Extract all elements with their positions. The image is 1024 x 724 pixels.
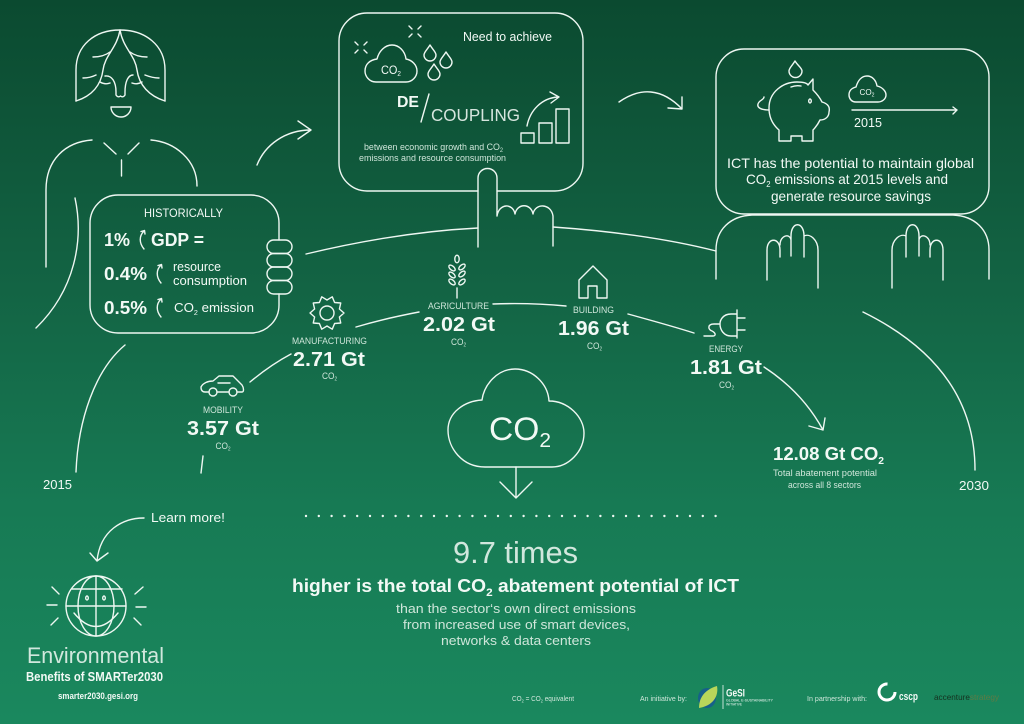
resource row xyxy=(104,259,247,288)
total abatement potential: Total abatement potential xyxy=(773,468,877,479)
total abatement potential: 2 xyxy=(878,456,884,467)
icon: house xyxy=(579,266,607,298)
logo: gesi: GLOBAL E-SUSTAINABILITY xyxy=(726,698,774,702)
logo: gesi xyxy=(698,685,774,709)
description: between economic growth and CO xyxy=(364,142,510,153)
value: 1.81 Gt xyxy=(690,357,762,379)
ict statement: ICT has the potential to maintain global xyxy=(727,155,974,171)
icon: piggy bank xyxy=(758,61,829,141)
value: 2 xyxy=(334,376,337,382)
value: 3.57 Gt xyxy=(187,418,259,440)
sector: building xyxy=(558,266,629,352)
icon: small co2 cloud: 2 xyxy=(872,92,875,98)
value: CO xyxy=(587,341,600,351)
icon: co2 cloud xyxy=(365,45,417,82)
headline description: than the sector‘s own direct emissions xyxy=(396,601,637,616)
gdp row: GDP = xyxy=(151,230,204,250)
icon: smiling globe xyxy=(47,576,146,636)
panel: ict potential xyxy=(716,49,989,470)
need to achieve: Need to achieve xyxy=(463,29,552,44)
value: CO xyxy=(451,337,464,347)
url: smarter2030.gesi.org xyxy=(58,691,138,702)
description: 2 xyxy=(500,148,504,154)
headline: abatement potential: higher is the total CO xyxy=(292,576,474,596)
headline description: from increased use of smart devices, xyxy=(403,617,630,632)
headline description: networks & data centers xyxy=(441,633,592,648)
icon: small co2 cloud xyxy=(849,76,886,102)
big co2 cloud: 2 xyxy=(539,430,551,452)
person: body xyxy=(36,140,203,473)
headline: 9.7 times: 9.7 times xyxy=(453,535,578,570)
arrow to ict panel xyxy=(619,92,682,109)
sector: mobility xyxy=(187,376,259,452)
year 2015: 2015 xyxy=(43,478,72,492)
value: AGRICULTURE xyxy=(428,301,489,312)
panel outline xyxy=(716,49,989,214)
year 2030: 2030 xyxy=(959,479,989,493)
value: BUILDING xyxy=(573,305,614,316)
timeline arrow xyxy=(852,107,957,114)
big co2 cloud xyxy=(448,369,584,467)
environmental title: Environmental xyxy=(27,643,164,668)
emission row: CO xyxy=(174,300,194,315)
value: 2 xyxy=(731,386,734,392)
value: 2.02 Gt xyxy=(423,314,495,336)
icon: plug xyxy=(704,310,745,338)
value xyxy=(558,305,629,352)
icon: co2 cloud: CO xyxy=(381,63,399,77)
resource row: resource xyxy=(173,259,221,274)
gdp row: 1% xyxy=(104,230,130,250)
logo: cscp: cscp xyxy=(899,691,918,703)
initiative label: An initiative by: xyxy=(640,694,687,703)
panel: decoupling xyxy=(339,13,583,247)
decoupling title xyxy=(397,94,520,125)
dotted divider xyxy=(306,515,717,517)
value xyxy=(292,336,367,382)
emission row: 0.5% xyxy=(104,298,147,318)
icon: pointing hand xyxy=(478,169,553,247)
total abatement potential xyxy=(773,444,884,491)
ict statement: emissions at 2015 levels and xyxy=(771,171,948,187)
ict statement xyxy=(727,155,974,204)
icon: drops xyxy=(424,45,452,80)
arrow down xyxy=(500,467,532,498)
decoupling title: COUPLING xyxy=(431,105,520,125)
partnership label: In partnership with: xyxy=(807,694,867,703)
right body curve xyxy=(863,312,975,470)
footnote: 2 xyxy=(522,698,524,704)
logo: accenture strategy: accenturestrategy xyxy=(934,692,1000,702)
panel outline xyxy=(339,13,583,191)
heading: HISTORICALLY xyxy=(144,206,223,220)
icon: co2 cloud: 2 xyxy=(397,71,401,78)
rising arrows xyxy=(140,230,162,317)
resource row: consumption xyxy=(173,273,247,288)
arrow to decoupling panel xyxy=(257,121,311,165)
decoupling title: DE xyxy=(397,94,419,111)
logo: gesi: INITIATIVE xyxy=(726,702,743,706)
footnote: 2 xyxy=(541,698,543,704)
value xyxy=(187,405,259,452)
total abatement potential: across all 8 sectors xyxy=(788,480,861,491)
resource row: 0.4% xyxy=(104,264,147,284)
value: 2 xyxy=(463,342,466,348)
sector: manufacturing xyxy=(292,297,367,382)
total abatement potential: 12.08 Gt CO xyxy=(773,444,875,464)
headline description xyxy=(396,601,637,648)
value: 2 xyxy=(599,346,602,352)
footnote: = CO xyxy=(524,694,541,703)
learn more arrow xyxy=(90,518,144,561)
description: emissions and resource consumption xyxy=(359,153,506,164)
footnote: equivalent xyxy=(543,694,575,703)
value: CO xyxy=(719,380,732,390)
sector: agriculture xyxy=(423,255,495,348)
gdp row xyxy=(104,230,204,250)
panel: historically xyxy=(90,195,292,333)
icon: car xyxy=(201,376,244,396)
timeline arc xyxy=(306,227,716,254)
value: MOBILITY xyxy=(203,405,244,416)
value: 2.71 Gt xyxy=(293,349,365,371)
icon: wheat xyxy=(448,255,466,298)
ict statement: CO xyxy=(746,171,767,187)
emission row xyxy=(104,298,254,318)
value: ENERGY xyxy=(709,344,744,355)
icon: gear xyxy=(310,297,344,329)
icon: sparkles xyxy=(355,26,421,53)
emission row: emission xyxy=(198,300,254,315)
ict statement: 2 xyxy=(766,180,771,189)
sector: energy xyxy=(690,310,762,392)
icon: growth bars xyxy=(521,92,569,143)
learn more: Learn more! xyxy=(151,511,225,525)
big co2 cloud: CO xyxy=(489,411,537,447)
arms and hands xyxy=(716,215,989,288)
emission row: 2 xyxy=(194,310,198,317)
logo: cscp xyxy=(879,684,918,703)
value xyxy=(423,301,495,348)
description xyxy=(359,142,506,164)
headline: abatement potential: abatement potential of ICT xyxy=(493,576,739,596)
panel outline with hand xyxy=(90,195,292,333)
ict statement: generate resource savings xyxy=(771,188,931,204)
icon: small co2 cloud: CO xyxy=(860,88,872,97)
headline: abatement potential: 2 xyxy=(486,587,493,599)
value: CO xyxy=(322,371,336,381)
value: 2 xyxy=(228,446,231,452)
value: MANUFACTURING xyxy=(292,336,367,347)
value xyxy=(690,344,762,392)
subtitle: Benefits of SMARTer2030 xyxy=(26,670,163,684)
year 2015: 2015 xyxy=(854,116,882,130)
sector connector lines xyxy=(250,304,694,382)
value: 1.96 Gt xyxy=(558,318,629,340)
footnote: CO xyxy=(512,694,523,703)
value: CO xyxy=(216,441,229,451)
person: head xyxy=(76,30,165,117)
logo: gesi: GeSI xyxy=(726,688,745,700)
arrow to total xyxy=(764,367,825,430)
